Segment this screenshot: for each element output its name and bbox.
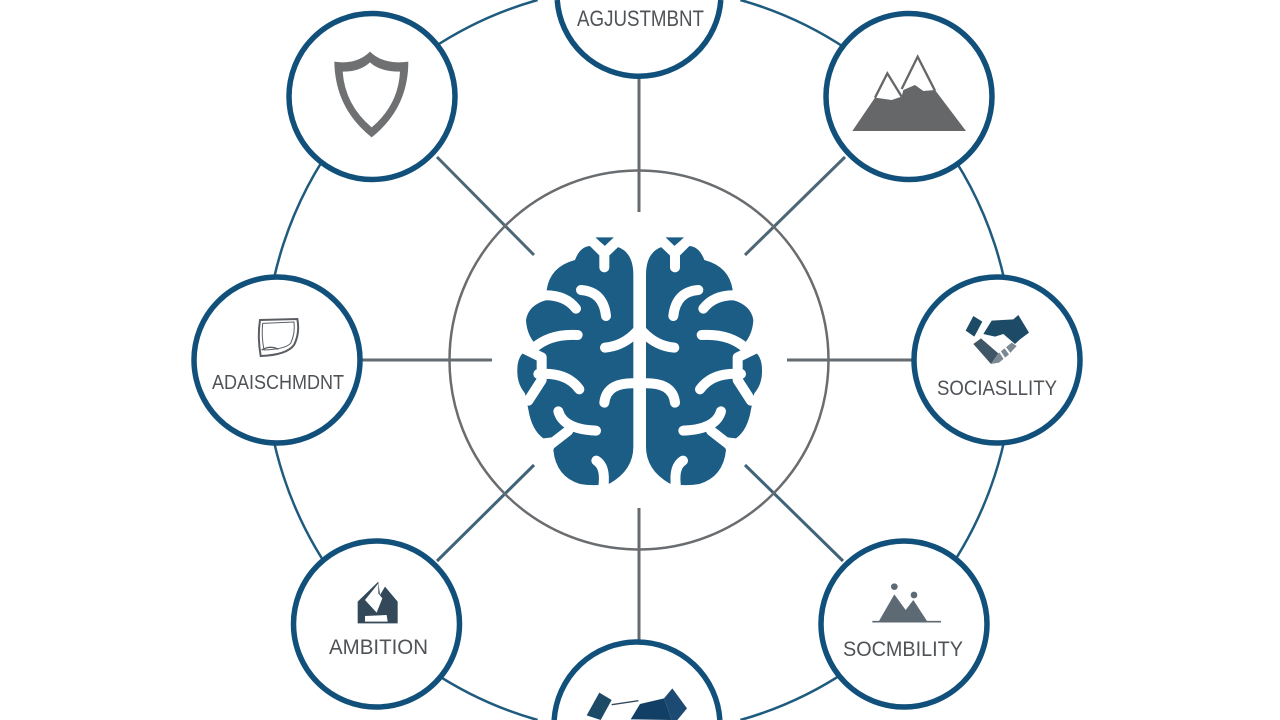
spokes connecting center to nodes <box>362 78 912 642</box>
icon: mountain <box>852 57 966 131</box>
icon: handshake <box>966 315 1029 364</box>
icon: small mountains <box>872 583 941 622</box>
node: mountain <box>826 14 992 180</box>
node: adaptability <box>194 277 360 443</box>
icon: device <box>259 319 298 356</box>
icon: shield <box>334 52 408 137</box>
label: sociability: SOCMBILITY <box>843 638 963 661</box>
icon: brain <box>517 237 762 487</box>
node: sociability lower right <box>821 541 987 707</box>
icon: ambition emblem <box>358 582 398 623</box>
node: bottom handshake <box>554 642 720 720</box>
outer ring <box>265 0 1013 720</box>
node: shield <box>289 14 455 180</box>
label: sociability: SOCIASLLITY <box>937 377 1057 400</box>
label: adjustment: AGJUSTMBNT <box>577 6 704 31</box>
label: adaptability: ADAISCHMDNT <box>212 372 344 394</box>
node: sociability right <box>914 277 1080 443</box>
node: top adjustment <box>557 0 721 76</box>
label: ambition: AMBITION <box>329 636 428 659</box>
node: ambition <box>294 541 460 707</box>
icon: handshake <box>587 688 687 720</box>
central circle <box>450 170 828 550</box>
